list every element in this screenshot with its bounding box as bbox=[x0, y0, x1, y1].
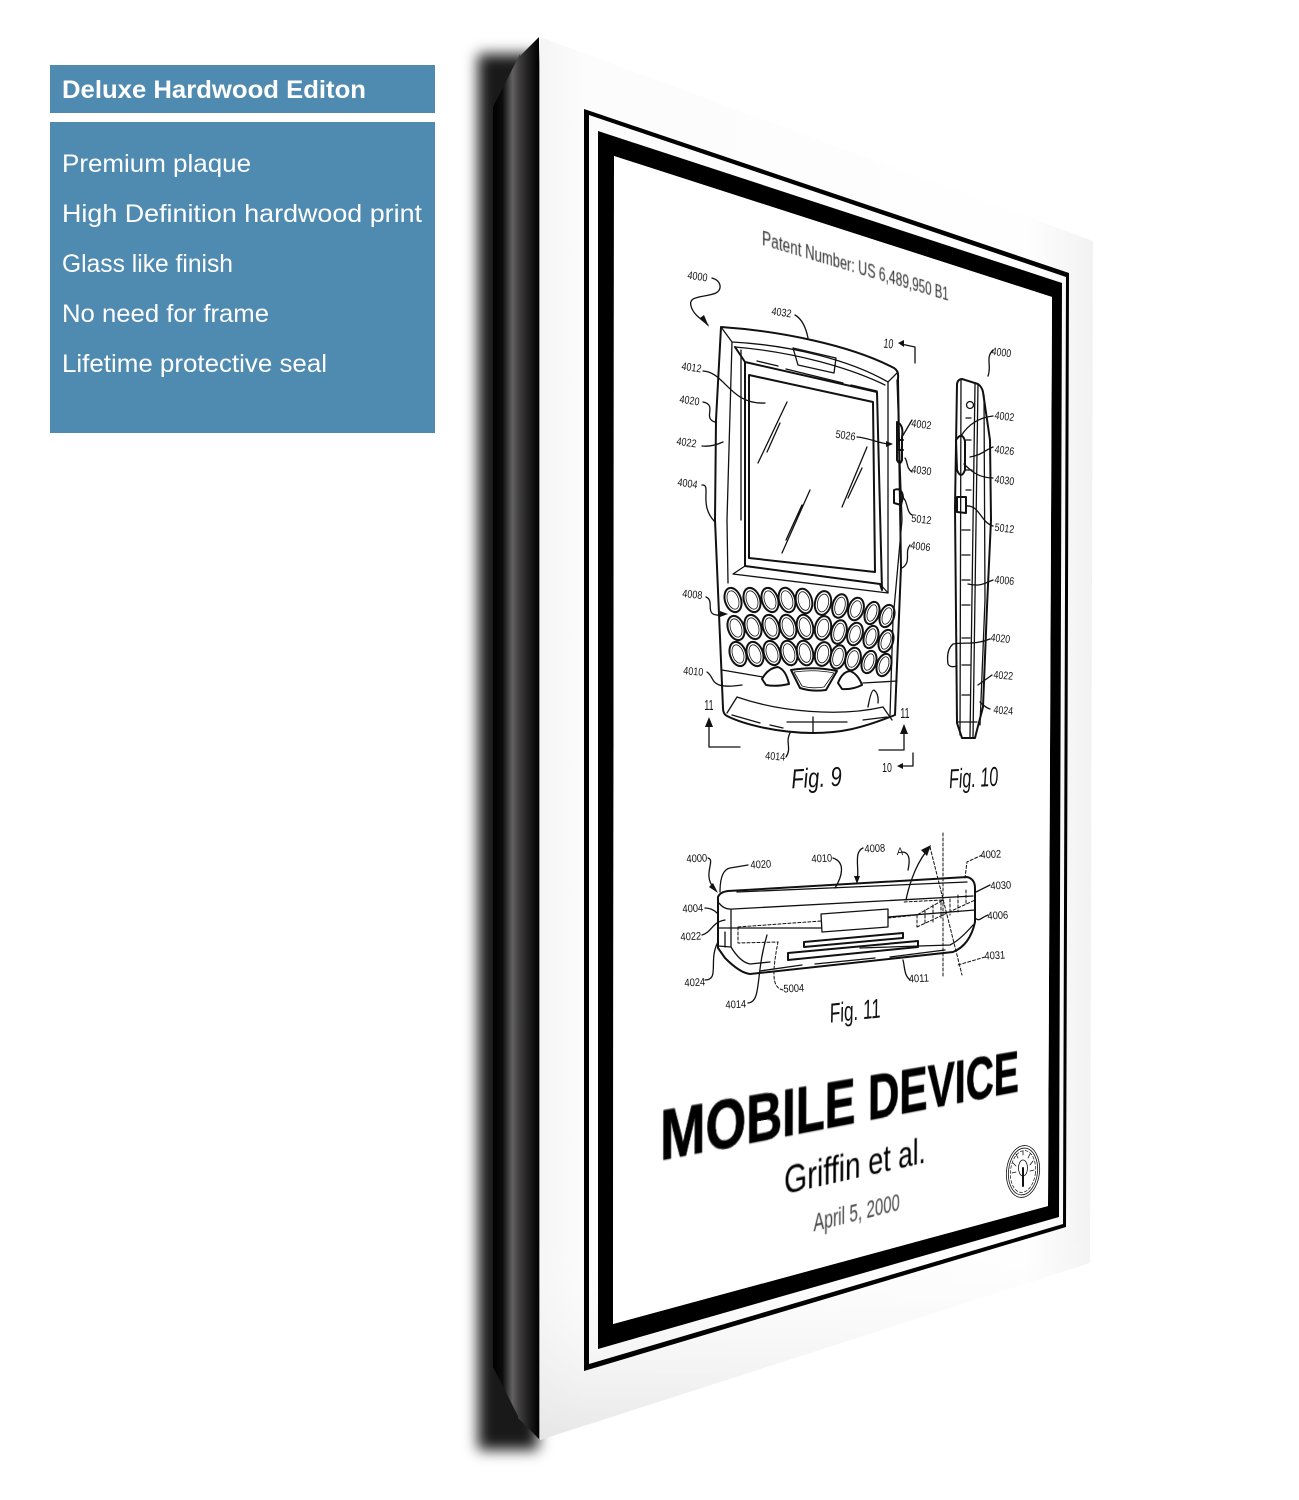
scroll wheel and side button bbox=[894, 422, 903, 505]
reference numerals: 11 bbox=[900, 705, 910, 722]
side inner lines bbox=[958, 380, 985, 737]
reference numerals: 4014 bbox=[765, 751, 786, 764]
bottom view reference numerals: 4011 bbox=[909, 973, 929, 986]
bottom view reference numerals bbox=[680, 843, 1012, 1012]
inventor: Griffin et al.: Griffin et al. bbox=[784, 1131, 926, 1204]
reference numerals: 10 bbox=[882, 761, 892, 776]
reference numerals: 4006 bbox=[910, 540, 931, 555]
caption: Fig. 9: Fig. 9 bbox=[790, 762, 843, 795]
side reference numerals: 4022 bbox=[993, 669, 1014, 683]
feature list: High Definition hardwood print bbox=[62, 200, 422, 228]
pivot arrow A bbox=[902, 847, 930, 900]
side reference numerals: 4030 bbox=[994, 474, 1015, 489]
side reference numerals: 4006 bbox=[994, 574, 1015, 588]
leader arrowheads bbox=[700, 315, 908, 769]
bottom view reference numerals: 4020 bbox=[750, 859, 772, 872]
reference numerals: 5012 bbox=[911, 513, 932, 528]
bottom view reference numerals: 4006 bbox=[987, 910, 1009, 923]
connector block bbox=[821, 909, 888, 932]
side tick marks bbox=[962, 418, 972, 695]
navigation buttons bbox=[762, 667, 862, 691]
panel: product features bbox=[50, 65, 435, 433]
bottom view leaders bbox=[702, 848, 990, 1003]
lower housing lines bbox=[722, 670, 897, 733]
poster text in perspective bbox=[660, 225, 1019, 1237]
slots bbox=[788, 933, 918, 960]
bottom view reference numerals: 4024 bbox=[684, 977, 706, 990]
bottom view outline bbox=[718, 877, 975, 974]
patent number line: Patent Number: US 6,489,950 B1 bbox=[762, 225, 949, 305]
reference numerals: 4032 bbox=[771, 306, 793, 321]
poster border bbox=[584, 109, 1069, 1371]
side reference numerals: 4000 bbox=[991, 346, 1012, 361]
bottom view reference numerals: 5004 bbox=[783, 983, 805, 996]
feature list: Premium plaque bbox=[62, 150, 251, 178]
plaque side edge bbox=[493, 37, 539, 1439]
leader lines bbox=[691, 278, 915, 766]
reference numerals: 4010 bbox=[683, 665, 704, 679]
patent figure 10: phone side view bbox=[948, 346, 1015, 794]
bottom view reference numerals: 4000 bbox=[686, 853, 708, 866]
caption: Fig. 11: Fig. 11 bbox=[828, 992, 882, 1029]
date: April 5, 2000 bbox=[813, 1189, 900, 1237]
screen glare marks bbox=[758, 402, 867, 553]
title: MOBILE DEVICE: MOBILE DEVICE bbox=[660, 1039, 1019, 1177]
bottom view reference numerals: 4004 bbox=[682, 903, 704, 916]
bottom view reference numerals: 4010 bbox=[811, 853, 833, 866]
speaker tab bbox=[793, 348, 836, 373]
side reference numerals: 5012 bbox=[994, 522, 1015, 537]
bottom view reference numerals: A bbox=[897, 846, 903, 858]
patent figure 9: phone front view bbox=[676, 270, 932, 795]
bottom view reference numerals: 4031 bbox=[984, 950, 1006, 963]
plaque drop shadow bbox=[478, 54, 538, 1450]
side reference numerals: 4002 bbox=[994, 410, 1015, 425]
bottom view reference numerals: 4022 bbox=[680, 931, 702, 944]
phone body outline bbox=[715, 327, 902, 733]
side reference numerals bbox=[990, 346, 1015, 718]
reference numerals: 4012 bbox=[681, 361, 703, 376]
side reference numerals: 4020 bbox=[990, 632, 1011, 646]
reference numerals: 11 bbox=[704, 697, 714, 714]
side reference numerals: 4024 bbox=[993, 704, 1014, 718]
reference numerals: 4004 bbox=[677, 477, 699, 492]
caption: Fig. 10: Fig. 10 bbox=[948, 761, 999, 794]
bottom view reference numerals: 4030 bbox=[990, 880, 1012, 893]
panel heading bar: Deluxe Hardwood Editon bbox=[62, 76, 366, 104]
reference numerals bbox=[676, 270, 932, 776]
bottom view reference numerals: 4014 bbox=[725, 999, 747, 1012]
side leader lines bbox=[948, 350, 993, 709]
feature list: Glass like finish bbox=[62, 250, 233, 278]
reference numerals: 5026 bbox=[835, 429, 857, 444]
bottom view reference numerals: 4008 bbox=[864, 843, 886, 856]
reference numerals: 4002 bbox=[911, 418, 932, 433]
feature list: Lifetime protective seal bbox=[62, 350, 327, 378]
bottom view arrowheads bbox=[709, 845, 931, 893]
reference numerals: 10 bbox=[883, 337, 894, 352]
reference numerals: 4030 bbox=[911, 464, 932, 479]
side camera bbox=[966, 402, 974, 408]
keyboard: three rows of keys bbox=[722, 586, 897, 678]
feature list bbox=[50, 122, 435, 433]
plaque front face bbox=[540, 37, 1093, 1440]
side scroll wheel and button bbox=[956, 436, 966, 513]
bottom view inner lines bbox=[718, 882, 975, 971]
panel heading bar bbox=[50, 65, 435, 113]
hidden lines bbox=[738, 833, 975, 977]
side reference numerals: 4026 bbox=[994, 444, 1015, 459]
seal: light bulb logo bbox=[1004, 1144, 1042, 1199]
side body outline bbox=[955, 379, 991, 738]
reference numerals: 4000 bbox=[687, 270, 709, 285]
feature list: No need for frame bbox=[62, 300, 269, 328]
reference numerals: 4008 bbox=[682, 588, 703, 602]
patent figure 11: phone bottom perspective bbox=[680, 833, 1012, 1029]
reference numerals: 4022 bbox=[676, 436, 698, 451]
bottom view reference numerals: 4002 bbox=[980, 849, 1002, 862]
reference numerals: 4020 bbox=[679, 394, 701, 409]
